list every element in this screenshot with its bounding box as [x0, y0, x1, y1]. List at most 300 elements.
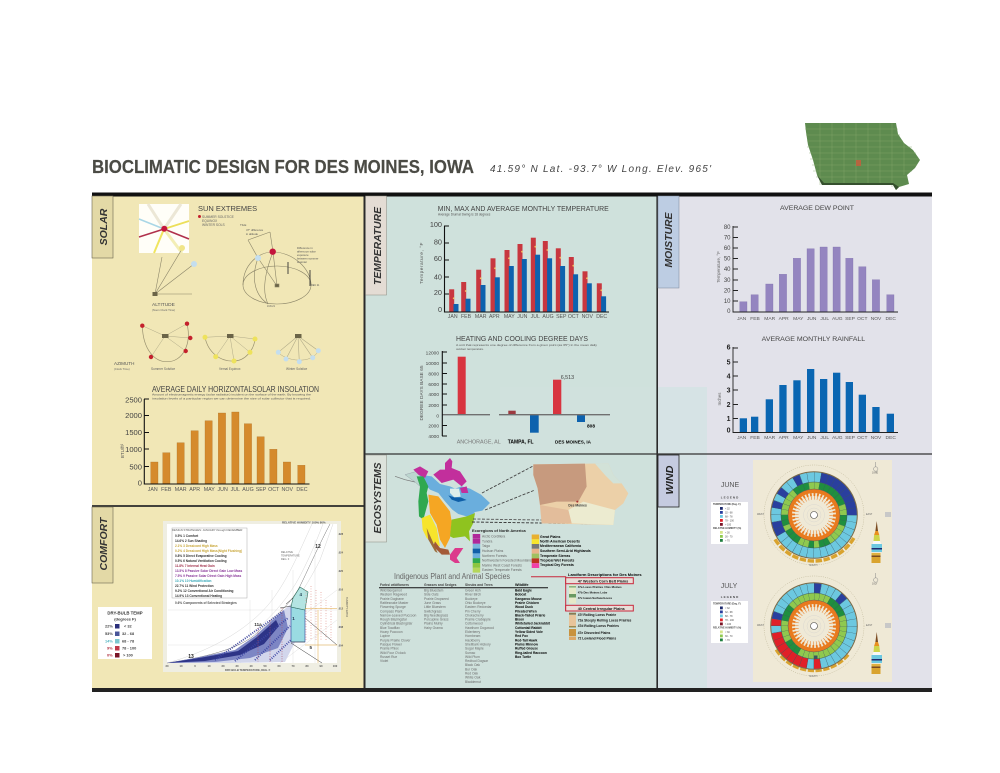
list: forbs and wildflowers: Narrow-Leaved Puccoon: [380, 613, 416, 617]
list: grasses and sedges: Hairy Grama: [424, 626, 443, 630]
bar chart: heating and cooling degree days: 2000: [428, 403, 439, 409]
list: landform descriptions with red callouts: [531, 572, 642, 640]
bar chart: average monthly rainfall: JUN: [807, 435, 817, 441]
heading: average monthly rainfall: AVERAGE MONTHLY RAINFALL: [762, 336, 865, 343]
list: wildlife: Black-Tailed Prairie: [515, 613, 546, 617]
heading: sun extremes and legend: SUMMER SOLSTICE: [202, 215, 235, 219]
tab: MOISTURE: [658, 196, 679, 288]
list: shrubs and trees: Hawthorn Dogwood: [465, 626, 494, 630]
bar chart: monthly temperature: Temperature, °F: [419, 242, 425, 284]
chart: July elevation stack: [872, 623, 891, 674]
legend: ecoregions column one: Northern Forests: [482, 554, 507, 558]
bar chart: average dew point: Temperature, °F: [716, 251, 721, 283]
heading: degree days: outdoor temperature.: [456, 347, 484, 351]
legend: ecoregions column one: Arctic Cordillera: [482, 534, 505, 538]
chart inset: design strategies list: 0.5% 1 Comfort: [175, 534, 199, 538]
list: grasses and sedges: Little Bluestem: [424, 605, 446, 609]
heading: solar insolation: Amount of electromagnetic energy (solar radiation) incident on the surface of the earth. By knowing the: [152, 392, 311, 396]
bar chart: monthly temperature: 80: [434, 238, 442, 246]
legend: June wind rose: 32 - 68: [725, 511, 733, 514]
list: landform descriptions with red callouts: 47f Rolling Loess Prairie: [578, 613, 616, 617]
list: wildlife: Kangaroo Mouse: [515, 597, 542, 601]
bar chart: heating and cooling degree days: 808: [587, 424, 595, 430]
legend: dry-bulb temperature: 22%: [105, 624, 113, 628]
chart: psychrometric comfort chart: DEG. F: [281, 558, 290, 561]
bar chart: average dew point: FEB: [750, 316, 760, 322]
diagram: sun dome: between summer: [297, 256, 319, 260]
list: shrubs and trees: Sugar Maple: [465, 647, 484, 651]
list: grasses and sedges: Porcupine Grass: [424, 618, 449, 622]
chart: psychrometric comfort chart: HUMIDITY RATIO: [345, 597, 348, 617]
list: wildlife: [515, 583, 551, 659]
legend: dry-bulb temperature: 0%: [107, 652, 113, 658]
bar chart: average dew point: [716, 225, 898, 322]
list: wildlife: Cottontail Rabbit: [515, 626, 542, 630]
diagram: altitude: [152, 245, 197, 312]
list: shrubs and trees: Eastern Redcedar: [465, 605, 492, 609]
list: forbs and wildflowers: Prairie Dogbane: [380, 597, 404, 601]
tab: TEMPERATURE: [366, 196, 386, 295]
bar chart: average monthly rainfall: 4: [727, 374, 731, 380]
title: BIOCLIMATIC DESIGN FOR DES MOINES, IOWA: [92, 156, 474, 177]
bar chart: heating and cooling degree days: 8000: [428, 372, 439, 378]
list: wildlife: Prairie Chicken: [515, 601, 539, 605]
chart: July wind rose: [757, 576, 873, 678]
bar chart: average monthly rainfall: NOV: [871, 435, 882, 441]
list: wildlife: Ruffed Grouse: [515, 647, 538, 651]
list: shrubs and trees: Black Oak: [465, 663, 480, 667]
bar chart: average dew point: NOV: [871, 316, 882, 322]
list: landform descriptions with red callouts: 47d Rolling Loess Prairies: [578, 624, 619, 628]
bar chart: heating and cooling degree days: ANCHORAGE, AL: [457, 440, 501, 446]
heading: temperature chart: Average Diurnal Swing is 18 degrees: [438, 212, 491, 216]
legend: dry-bulb temperature: 14%: [105, 638, 113, 644]
legend: ecoregions column two: Tropical Dry Forests: [540, 563, 574, 567]
list: shrubs and trees: Hornbeam: [465, 634, 481, 638]
list: forbs and wildflowers: Hoary Puccoon: [380, 630, 403, 634]
icon: June north marker: JUNE: [872, 472, 878, 474]
list: shrubs and trees: Elderberry: [465, 630, 481, 634]
diagram: azimuth summer solstice: [114, 322, 192, 371]
list: forbs and wildflowers: Compass Plant: [380, 609, 402, 613]
legend: July wind rose: 78 - 100: [725, 619, 734, 622]
diagram: altitude: (Noon Clock Time): [152, 308, 175, 312]
chart: June wind rose: EAST: [866, 513, 873, 516]
diagram: sun dome: in altitude: [246, 232, 258, 236]
chart: June wind rose: WEST: [757, 513, 764, 516]
icon: June north marker: [872, 462, 878, 474]
bar chart: heating and cooling degree days: 6,513: [561, 375, 574, 381]
legend: ecoregions column one: Hudson Plains: [482, 549, 504, 553]
chart inset: design strategies list: 0.6% Components of Selected Strategies: [175, 601, 237, 605]
bar chart: solar insolation: MAR: [175, 487, 187, 493]
bar chart: solar insolation: JUL: [231, 487, 240, 493]
bar chart: average monthly rainfall: SEP: [845, 435, 855, 441]
bar chart: average monthly rainfall: Inches: [717, 392, 722, 405]
list: wildlife: Whitetailed Jackrabbit: [515, 622, 551, 626]
list: forbs and wildflowers: Wild Four O'clock: [380, 651, 406, 655]
tab: SOLAR: [92, 196, 113, 258]
bar chart: solar insolation: APR: [189, 487, 200, 493]
legend: dry-bulb temperature: 32 - 68: [122, 631, 135, 636]
list: wildlife: Red-Tail Hawk: [515, 638, 537, 642]
chart: June wind rose: [757, 465, 873, 567]
diagram: azimuth summer solstice: Summer Solstice: [151, 367, 175, 371]
list: landform descriptions with red callouts: 47a Loess Prairies / Des Moines: [578, 585, 622, 589]
bar chart: solar insolation: 0: [138, 478, 142, 488]
bar chart: average dew point: JUL: [820, 316, 829, 322]
bar chart: heating and cooling degree days: 6000: [428, 382, 439, 388]
list: forbs and wildflowers: Purple Prairie Clover: [380, 638, 411, 642]
list: shrubs and trees: Chokecherry: [465, 613, 484, 617]
list: forbs and wildflowers: Russet Rue: [380, 655, 397, 659]
bar chart: monthly temperature: JUN: [517, 314, 528, 320]
bar chart: average dew point: JAN: [737, 316, 747, 322]
label: July: JULY: [721, 583, 738, 590]
chart: psychrometric comfort chart: 50: [264, 664, 267, 668]
chart: psychrometric comfort chart: 1: [292, 616, 295, 621]
bar chart: monthly temperature: SEP: [556, 314, 567, 320]
diagram: azimuth winter solstice: Winter Solstice: [286, 367, 307, 371]
dashed zoom lines to Iowa inset: [472, 465, 607, 524]
bar chart: average dew point: 70: [724, 236, 731, 242]
list: shrubs and trees: Green Ash: [465, 588, 481, 592]
list: wildlife: Plains Minnow: [515, 642, 538, 646]
chart: psychrometric comfort chart: 10: [180, 664, 183, 668]
bar chart: monthly temperature: DEC: [596, 314, 607, 320]
bar chart: average monthly rainfall: OCT: [857, 435, 867, 441]
bar chart: average dew point: DEC: [886, 316, 896, 322]
list: shrubs and trees: White Oak: [465, 676, 481, 680]
chart: psychrometric comfort chart: 70: [292, 664, 295, 668]
bar chart: monthly temperature: AUG: [542, 314, 554, 320]
tab: COMFORT: [92, 507, 113, 583]
bar chart: monthly temperature: [419, 220, 609, 320]
bar chart: monthly temperature: APR: [489, 314, 500, 320]
bar chart: solar insolation: AUG: [242, 487, 254, 493]
list: shrubs and trees: River Birch: [465, 593, 481, 597]
list: landform descriptions with red callouts: 72 Lowland Flood Plains: [578, 636, 616, 640]
list: forbs and wildflowers: Cylindrical Blazingstar: [380, 622, 413, 626]
bar chart: monthly temperature: 20: [434, 288, 442, 297]
list: wildlife: Wood Duck: [515, 605, 533, 609]
legend: ecoregions column two: Mediterranean California: [540, 544, 581, 548]
bar chart: average monthly rainfall: 2: [727, 402, 731, 409]
chart: psychrometric comfort chart: 0: [194, 664, 196, 668]
list: forbs and wildflowers: Flowering Spurge: [380, 605, 406, 609]
chart: June elevation stack: [872, 512, 891, 563]
list: landform descriptions with red callouts: Landform Descriptions for Des Moines: [568, 572, 642, 577]
diagram: azimuth summer solstice: AZIMUTH: [114, 361, 134, 366]
chart: psychrometric comfort chart: .024: [338, 550, 344, 554]
chart: July wind rose: EAST: [866, 624, 873, 627]
heading: degree days: [456, 334, 598, 351]
list: landform descriptions with red callouts: 40 Central Irregular Plains: [578, 607, 625, 611]
chart: psychrometric comfort chart: 12: [315, 544, 321, 550]
chart inset: design strategies list: 9.2% 12 Conventional Air Conditioning: [175, 589, 234, 593]
subtitle: coordinates: 41.59° N Lat. -93.7° W Long. Elev. 965': [490, 164, 712, 175]
chart: psychrometric comfort chart: RELATIVE: [281, 551, 293, 554]
chart inset: design strategies list: 0.2% 4 Dessicant High Mass(Night Flushing): [175, 549, 242, 553]
tab: COMFORT: COMFORT: [98, 516, 110, 570]
legend: ecoregions column one: Northwestern Forested Mountains: [482, 558, 532, 562]
list: wildlife: Bison: [515, 618, 524, 622]
diagram: altitude: ALTITUDE: [152, 302, 175, 308]
bar chart: average dew point: 40: [724, 267, 731, 273]
legend: July wind rose: > 70: [725, 639, 730, 642]
list: shrubs and trees: Pin Cherry: [465, 609, 481, 613]
chart: psychrometric comfort chart: .020: [338, 569, 344, 573]
bar chart: average dew point: APR: [779, 316, 789, 322]
chart: psychrometric comfort chart: .012: [338, 606, 344, 610]
legend: June wind rose: 78 - 100: [725, 519, 734, 522]
bar chart: average monthly rainfall: JAN: [737, 435, 747, 441]
legend: July wind rose: 32 - 68: [725, 611, 733, 614]
bar chart: average monthly rainfall: FEB: [750, 435, 760, 441]
diagram: azimuth vernal equinox: [202, 334, 258, 371]
bar chart: average dew point: 0: [727, 309, 731, 315]
chart: psychrometric comfort chart: 30: [236, 664, 239, 668]
bar chart: solar insolation: JUN: [218, 487, 228, 493]
legend: July wind rose: TEMPERATURE (Deg. F): [713, 602, 741, 606]
panel: solar background: [92, 196, 364, 506]
list: wildlife: Wildlife: [515, 583, 528, 587]
legend: June wind rose: > 70: [725, 539, 730, 542]
list: wildlife: Bald Eagle: [515, 588, 532, 592]
bar chart: monthly temperature: JUL: [531, 314, 540, 320]
bar chart: average monthly rainfall: MAY: [793, 435, 804, 441]
diagram: azimuth vernal equinox: Vernal Equinox: [219, 367, 241, 371]
chart: psychrometric comfort chart: 11a: [254, 622, 262, 627]
diagram: sun dome: JUN 21: [267, 305, 276, 308]
bar chart: monthly temperature: FEB: [461, 314, 472, 320]
tab: WIND: WIND: [664, 465, 676, 494]
bar chart: average dew point: AUG: [832, 316, 843, 322]
bar chart: solar insolation: BTU/ft²: [120, 443, 125, 458]
legend: ecoregions column one: Taiga: [482, 544, 490, 548]
chart inset: design strategies list: 22.7% 11 Wind Protection: [175, 584, 214, 588]
legend: ecoregions column two: Great Plains: [540, 535, 560, 539]
list: shrubs and trees: Buckeye: [465, 597, 478, 601]
chart: psychrometric comfort chart: 20: [166, 664, 169, 668]
chart: psychrometric comfort chart: TEMPERATURE: [281, 554, 300, 558]
bar chart: monthly temperature: 100: [430, 220, 442, 229]
legend: June wind rose: TEMPERATURE (Deg. F): [713, 503, 741, 506]
label: June: JUNE: [721, 482, 739, 489]
tab: MOISTURE: MOISTURE: [663, 212, 675, 268]
chart: July wind rose: WEST: [757, 624, 764, 627]
list: grasses and sedges: June Grass: [424, 601, 441, 605]
legend: July wind rose: [711, 595, 748, 643]
bar chart: heating and cooling degree days: 0: [436, 414, 439, 420]
chart: psychrometric comfort chart: .008: [338, 625, 344, 629]
legend: dry-bulb temperature: 53%: [105, 631, 113, 636]
chart inset: design strategies list: 11.8% 7 Internal Heat Gain: [175, 564, 215, 568]
bar chart: average monthly rainfall: [717, 344, 898, 441]
bar chart: solar insolation: SEP: [256, 487, 267, 493]
bar chart: average dew point: 60: [724, 246, 731, 252]
chart: psychrometric comfort chart: DRY-BULB TEMPERATURE, DEG. F: [225, 668, 271, 672]
bar chart: heating and cooling degree days: 4000: [428, 392, 439, 398]
heading: indigenous plants and animals: Indigenous Plant and Animal Species: [394, 572, 510, 581]
legend: dry-bulb temperature: [98, 607, 152, 659]
bar chart: solar insolation: FEB: [161, 487, 172, 493]
heading: sun extremes and legend: WINTER SOLS: [202, 223, 226, 227]
legend: June wind rose: < 30: [725, 531, 730, 534]
bar chart: heating and cooling degree days: 2000: [428, 424, 439, 430]
legend: ecoregions column two: [532, 534, 591, 568]
chart: psychrometric comfort chart: 80: [306, 664, 309, 668]
list: shrubs and trees: Bur Oak: [465, 667, 477, 671]
legend: ecoregions column two: North American Deserts: [540, 540, 580, 544]
list: landform descriptions with red callouts: 47e Dissected Plains: [578, 631, 610, 635]
chart inset: design strategies list: 0.8% 5 Direct Evaporative Cooling: [175, 554, 227, 558]
bar chart: solar insolation: NOV: [282, 487, 294, 493]
chart inset: design strategies list: [172, 528, 247, 605]
chart inset: design strategies list: 10.1% 10 Humidification: [175, 579, 212, 583]
bar chart: average monthly rainfall: APR: [779, 435, 789, 441]
bar chart: average monthly rainfall: AUG: [832, 435, 843, 441]
chart: psychrometric comfort chart: 100: [333, 664, 338, 668]
diagram: sun dome: TILE: [240, 223, 246, 227]
chart: psychrometric comfort chart: 20: [222, 664, 225, 668]
list: grasses and sedges: Plains Muhly: [424, 622, 443, 626]
diagram: sun dome: exposure: [297, 253, 309, 257]
legend: ecoregions column one: Ecoregions of North America: [472, 528, 527, 533]
list: forbs and wildflowers: Wild Bergamot: [380, 588, 402, 592]
list: shrubs and trees: Shellbark Hickory: [465, 642, 491, 646]
bar chart: average dew point: MAY: [793, 316, 804, 322]
chart inset: design strategies list: 0.5% 6 Natural Ventilation Cooling: [175, 559, 227, 563]
bar chart: heating and cooling degree days: DEGREE DAYS BASE 65: [419, 365, 425, 421]
list: forbs and wildflowers: Violet: [380, 659, 388, 663]
map: North America ecoregions: [395, 458, 490, 563]
list: wildlife: Bobcat: [515, 593, 527, 597]
bar chart: monthly temperature: MAR: [475, 314, 487, 320]
bar chart: average monthly rainfall: 1: [727, 416, 731, 423]
list: grasses and sedges: Switchgrass: [424, 609, 442, 613]
tab: SOLAR: SOLAR: [98, 208, 110, 245]
bar chart: solar insolation: DEC: [296, 487, 308, 493]
legend: ecoregions column two: Tropical Wet Forests: [540, 558, 574, 562]
bar chart: average dew point: 30: [724, 278, 731, 284]
tab: TEMPERATURE: TEMPERATURE: [372, 206, 384, 285]
heading: sun extremes and legend: EQUINOX: [202, 219, 218, 223]
list: grasses and sedges: Prairie Dropseed: [424, 597, 449, 601]
list: shrubs and trees: Redbud Dogsar: [465, 659, 489, 663]
legend: ecoregions column two: Southern Semi-Arid Highlands: [540, 549, 591, 553]
list: landform descriptions with red callouts: 47c Iowan Surface/Loess: [578, 596, 612, 600]
bar chart: average monthly rainfall: 0: [727, 428, 731, 434]
legend: June wind rose: 30 - 70: [725, 535, 733, 538]
legend: dry-bulb temperature: 78 - 100: [122, 646, 136, 650]
icon: Iowa state map: [805, 123, 920, 190]
chart: psychrometric comfort chart: .016: [338, 588, 344, 592]
legend: ecoregions column one: [472, 528, 532, 573]
list: forbs and wildflowers: Forbs/ wildflowers: [380, 583, 409, 587]
list: grasses and sedges: Big Needlegrass: [424, 613, 449, 617]
icon: July north marker: JULY: [872, 584, 878, 586]
list: wildlife: Red Fox: [515, 634, 528, 638]
heading: sun extremes and legend: SUN EXTREMES: [198, 204, 257, 213]
chart: psychrometric comfort chart: 40: [250, 664, 253, 668]
bar chart: average monthly rainfall: JUL: [820, 435, 829, 441]
list: grasses and sedges: Grasses and Sedges: [424, 583, 457, 587]
chart inset: design strategies list: 2.1% 3 Dessicant High Mass: [175, 544, 218, 548]
legend: June wind rose: [711, 496, 748, 544]
legend: ecoregions column one: Tundra: [482, 540, 492, 544]
chart: psychrometric comfort chart: 60: [278, 664, 281, 668]
diagram: sun dome: 47° difference: [246, 228, 264, 232]
list: shrubs and trees: [465, 583, 494, 684]
diagram: sun dome: afternoon solar: [297, 250, 316, 254]
legend: dry-bulb temperature: (degrees F): [114, 616, 136, 622]
list: forbs and wildflowers: Rattlesnake Master: [380, 601, 409, 605]
list: landform descriptions with red callouts: 47b Des Moines Lobe: [578, 590, 608, 594]
bar chart: heating and cooling degree days: 10000: [426, 361, 439, 367]
list: shrubs and trees: Shrubs and Trees: [465, 583, 493, 587]
chart inset: design strategies list: 14.9% 13 Conventional Heating: [175, 594, 222, 598]
legend: ecoregions column two: Temperate Sierras: [540, 554, 570, 558]
tab: ECOSYSTEMS: [366, 455, 386, 542]
chart inset: design strategies list: 14.6% 2 Sun Shading: [175, 539, 207, 543]
bar chart: solar insolation: 500: [129, 462, 142, 472]
legend: July wind rose: 30 - 70: [725, 635, 733, 638]
legend: June wind rose: LEGEND: [721, 496, 739, 500]
bar chart: monthly temperature: NOV: [582, 314, 593, 320]
list: shrubs and trees: Prairie Crabapple: [465, 618, 491, 622]
tab: ECOSYSTEMS: ECOSYSTEMS: [372, 462, 384, 534]
list: wildlife: Box Turtle: [515, 655, 531, 659]
heading: sun extremes and legend: [198, 204, 257, 227]
legend: dry-bulb temperature: 68 - 78: [122, 638, 135, 644]
panel: comfort background: [92, 506, 364, 689]
list: forbs and wildflowers: Pasque Flower: [380, 642, 403, 646]
legend: dry-bulb temperature: DRY-BULB TEMP: [107, 610, 143, 616]
heading: solar insolation: insolation levels of a particular region we can determine the size of solar collector that is required.: [152, 396, 311, 400]
legend: dry-bulb temperature: < 32: [124, 624, 133, 628]
list: grasses and sedges: [424, 583, 457, 630]
map inset: Iowa ecoregions: [533, 463, 628, 525]
list: wildlife: Yellow Sided Vole: [515, 630, 543, 634]
legend: dry-bulb temperature: 9%: [107, 646, 113, 650]
bar chart: average monthly rainfall: 6: [727, 344, 731, 352]
chart: psychrometric comfort chart: RELATIVE HUMIDITY 100% 80%: [282, 520, 326, 524]
list: forbs and wildflowers: Blue Toadflax: [380, 626, 400, 630]
legend: June wind rose: > 100: [725, 523, 732, 526]
diagram: sun dome: & winter: [297, 260, 307, 264]
bar chart: heating and cooling degree days: TAMPA, FL: [508, 440, 534, 446]
chart: psychrometric comfort chart: 13: [188, 654, 194, 660]
bar chart: solar insolation: 1500: [125, 428, 142, 437]
list: landform descriptions with red callouts: 72a Steeply Rolling Loess Prairies: [578, 618, 632, 622]
chart inset: design strategies list: 7.5% 9 Passive Solar Direct Gain High Mass: [175, 574, 241, 578]
list: forbs and wildflowers: Lupine: [380, 634, 390, 638]
bar chart: heating and cooling degree days: 4000: [428, 434, 439, 440]
list: shrubs and trees: Red Oak: [465, 672, 478, 676]
list: wildlife: Pileated Wren: [515, 609, 537, 613]
legend: July wind rose: < 30: [725, 631, 730, 634]
heading: solar insolation: [152, 384, 319, 400]
chart: June wind rose: SOUTH: [809, 564, 818, 567]
bar chart: heating and cooling degree days: 12000: [426, 350, 439, 356]
bar chart: monthly temperature: OCT: [568, 314, 580, 320]
chart inset: design strategies list: DESIGN STRATEGIES: JANUARY through DECEMBER: [172, 528, 242, 532]
diagram: sun dome: [240, 223, 320, 308]
heading: solar insolation: AVERAGE DAILY HORIZONTALSOLAR INSOLATION: [152, 384, 319, 394]
legend: dry-bulb temperature: > 100: [123, 652, 133, 658]
bar chart: heating and cooling degree days: [419, 350, 610, 446]
